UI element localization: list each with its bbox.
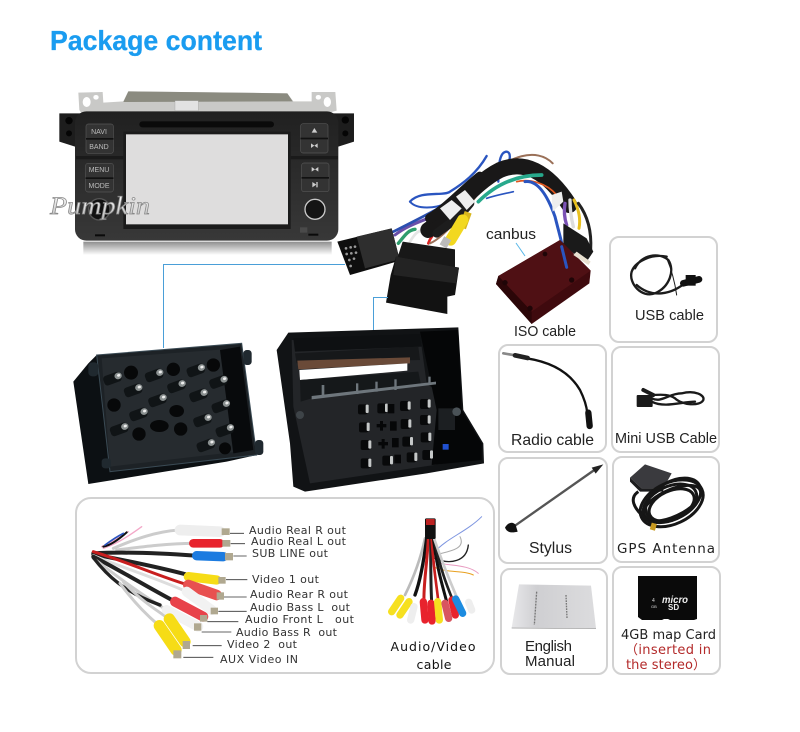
icon: GPS antenna	[630, 464, 711, 536]
rectangular connector close-up	[277, 327, 484, 492]
card note in red	[625, 643, 711, 673]
RCA output labels: Audio Rear R out	[250, 588, 349, 601]
English Manual label: Manual	[525, 653, 575, 670]
radio cable label: Radio cable	[511, 432, 594, 449]
RCA output labels: Audio Bass R out	[236, 626, 338, 639]
head unit button labels: MODE	[88, 183, 110, 190]
GPS antenna label: GPS Antenna	[617, 541, 715, 557]
audio/video cable caption	[390, 639, 476, 672]
head unit stereo	[59, 91, 354, 255]
panel: mini USB cable	[612, 347, 719, 452]
icon: radio cable	[503, 353, 590, 426]
round connector close-up	[73, 343, 263, 484]
panel: English manual	[501, 569, 607, 674]
RCA output labels	[220, 524, 355, 666]
full audio/video cable photo	[392, 517, 482, 621]
panel: audio/video cable	[76, 498, 494, 673]
head unit button labels: MENU	[89, 167, 109, 174]
icon: microSD card: GB	[651, 604, 657, 609]
canbus label with leader: canbus	[486, 226, 536, 243]
RCA harness drawing	[93, 527, 247, 658]
audio/video cable caption: cable	[416, 657, 452, 672]
icon: manual booklet	[512, 584, 596, 629]
English Manual label	[525, 638, 575, 670]
RCA output labels: Audio Front L out	[245, 613, 355, 626]
icon: microSD card	[638, 576, 697, 620]
RCA output labels: AUX Video IN	[220, 653, 298, 666]
panel: radio cable	[499, 345, 606, 452]
icon: microSD card: 4	[652, 598, 655, 604]
icon: USB cable	[631, 255, 699, 295]
panel: 4GB map card	[613, 567, 720, 674]
Pumpkin watermark: Pumpkin	[49, 193, 150, 220]
mini USB cable label: Mini USB Cable	[615, 430, 717, 447]
head unit button labels	[88, 129, 110, 190]
head unit button labels: BAND	[89, 144, 109, 151]
card note in red: （inserted in	[625, 643, 711, 658]
head unit button labels: NAVI	[91, 129, 107, 136]
RCA output labels: Audio Bass L out	[250, 601, 351, 614]
audio/video cable caption: Audio/Video	[390, 639, 476, 654]
connector leader lines	[164, 264, 388, 348]
ISO cable label: ISO cable	[514, 323, 576, 340]
icon: stylus	[505, 464, 603, 532]
USB cable label: USB cable	[635, 307, 704, 324]
RCA output labels: Video 1 out	[252, 573, 320, 586]
icon: mini USB cable	[637, 390, 704, 407]
panel: GPS antenna	[613, 457, 719, 562]
stylus label: Stylus	[529, 540, 572, 557]
card caption: 4GB map Card	[621, 628, 716, 643]
RCA output labels: SUB LINE out	[252, 547, 329, 560]
English Manual label: English	[525, 638, 572, 655]
canbus label with leader	[486, 226, 536, 256]
icon: microSD card: micro	[662, 595, 688, 606]
ISO wiring harness with canbus box	[337, 152, 593, 324]
panel: USB cable	[610, 237, 717, 342]
title: Package content	[50, 25, 262, 56]
RCA output labels: Audio Real L out	[251, 535, 347, 548]
RCA output labels: Audio Real R out	[249, 524, 347, 537]
card note in red: the stereo）	[626, 658, 706, 673]
RCA output labels: Video 2 out	[227, 638, 298, 651]
icon: microSD card: SD	[668, 603, 679, 612]
panel: stylus	[499, 458, 607, 563]
